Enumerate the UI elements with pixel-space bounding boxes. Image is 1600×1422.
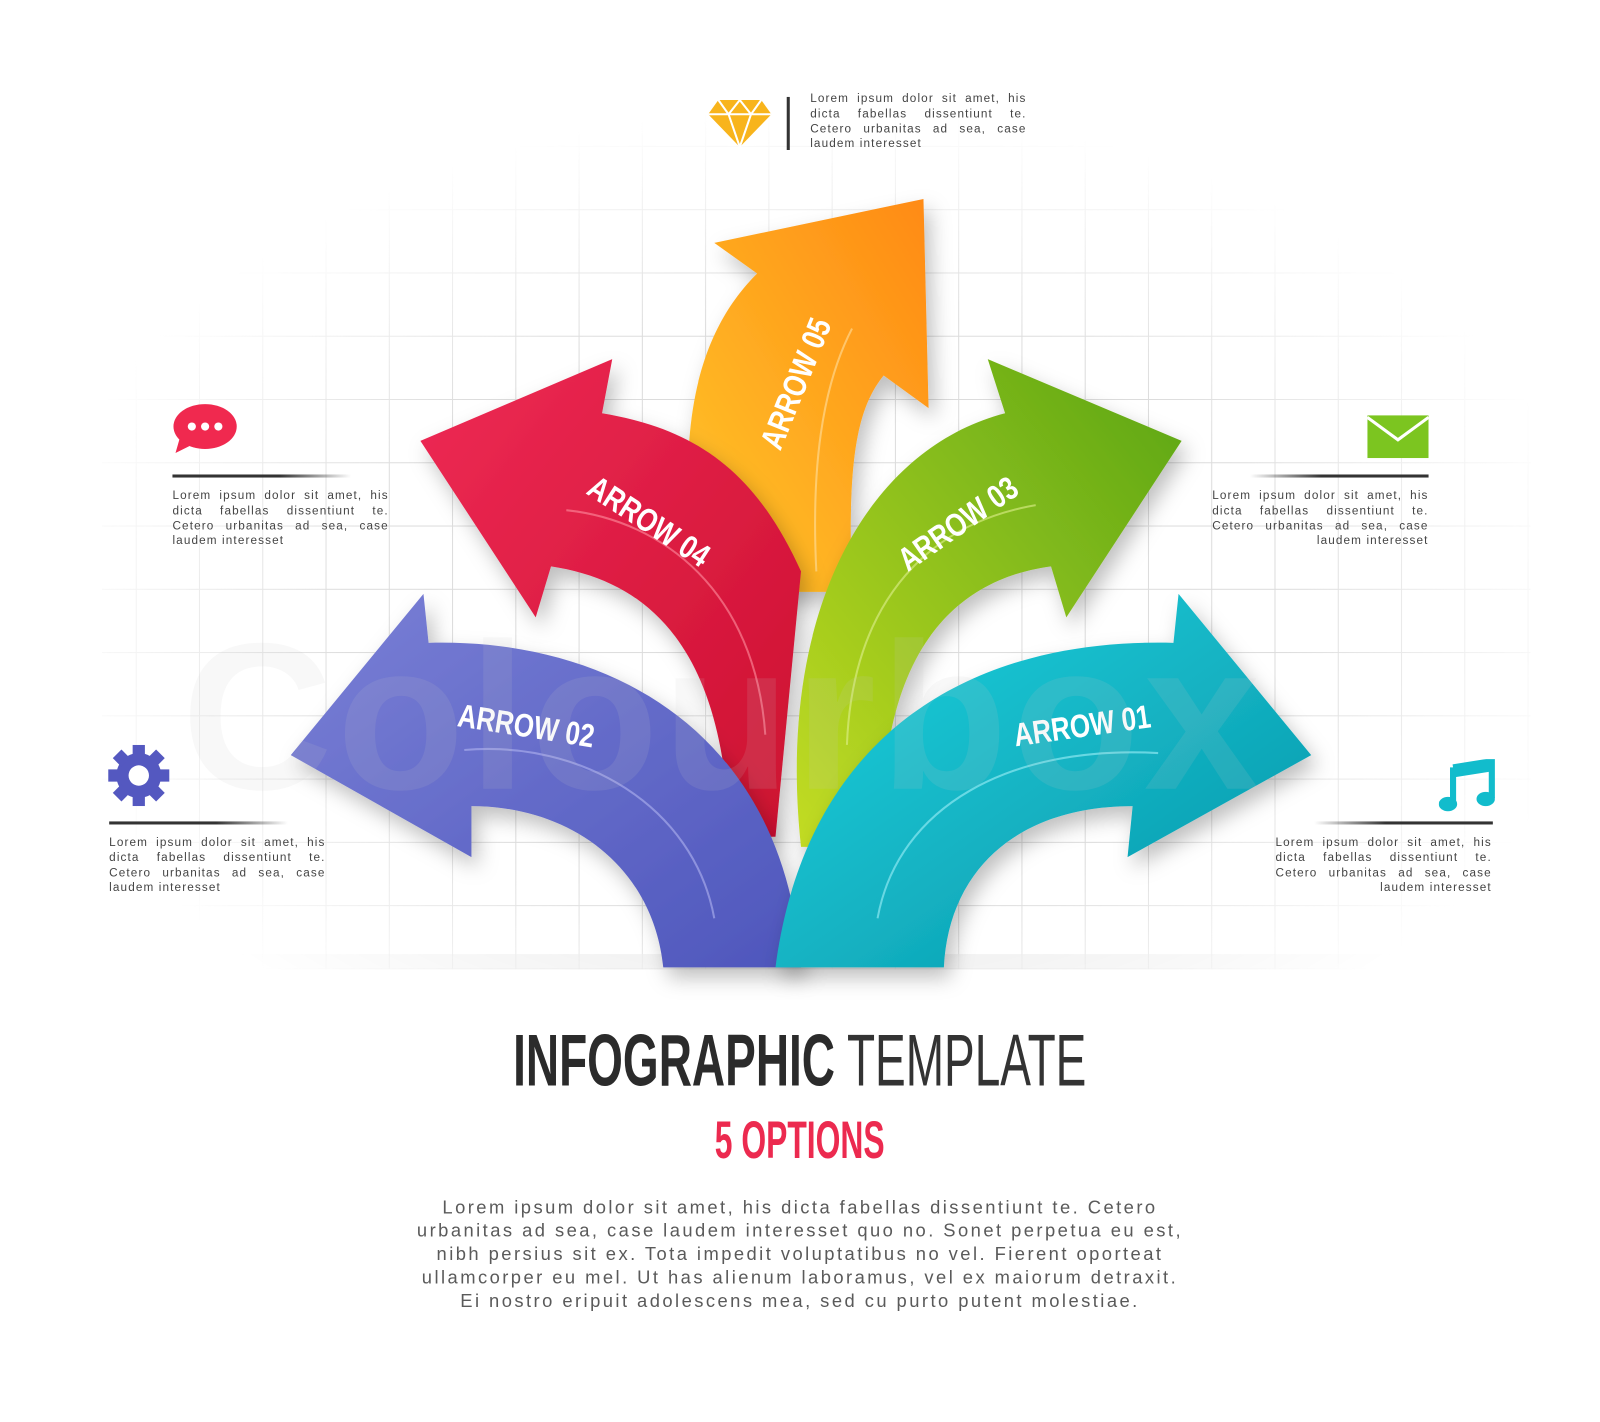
body text: urbanitas ad sea, case laudem interesset quo no. Sonet perpetua eu est, <box>417 1220 1183 1241</box>
icon: chat <box>174 404 237 453</box>
text: right top: Lorem ipsum dolor sit amet, his dicta fabellas dissentiunt te. Cetero urbanitas ad sea, case laudem interesset <box>1212 490 1429 547</box>
icon: envelope <box>1367 415 1428 458</box>
arrow 04 <box>420 359 801 837</box>
arrow 03: ARROW 03 <box>891 470 1025 578</box>
icon: gear <box>108 744 170 806</box>
arrow 05: ARROW 05 <box>754 313 839 455</box>
arrow 02: ARROW 02 <box>455 698 597 755</box>
arrows chart <box>290 199 1322 992</box>
text: top: Lorem ipsum dolor sit amet, his dicta fabellas dissentiunt te. Cetero urbanitas ad sea, case laudem interesset <box>810 93 1027 150</box>
arrow 03 <box>797 359 1182 847</box>
body text: Lorem ipsum dolor sit amet, his dicta fabellas dissentiunt te. Cetero <box>442 1197 1158 1217</box>
body text: Ei nostro eripuit adolescens mea, sed cu purto putent molestiae. <box>460 1291 1140 1311</box>
arrow 01: ARROW 01 <box>1011 699 1153 754</box>
text: left top: Lorem ipsum dolor sit amet, his dicta fabellas dissentiunt te. Cetero urbanitas ad sea, case laudem interesset <box>172 490 389 547</box>
body text <box>417 1197 1183 1311</box>
icon: diamond <box>708 100 772 146</box>
title: INFOGRAPHIC TEMPLATE <box>513 1020 1087 1102</box>
arrow 02 <box>291 594 801 967</box>
arrow 05 <box>689 199 929 592</box>
text: right bottom: Lorem ipsum dolor sit amet, his dicta fabellas dissentiunt te. Cetero urbanitas ad sea, case laudem interesset <box>1276 837 1492 894</box>
background grid <box>108 156 1525 970</box>
body text: ullamcorper eu mel. Ut has alienum laboramus, vel ex maiorum detraxit. <box>422 1267 1178 1288</box>
watermark: Colourbox <box>182 600 1264 834</box>
text: left bottom: Lorem ipsum dolor sit amet, his dicta fabellas dissentiunt te. Cetero urbanitas ad sea, case laudem interesset <box>109 837 326 894</box>
arrow 01 <box>776 594 1311 967</box>
body text: nibh persius sit ex. Tota impedit voluptatibus no vel. Fierent oporteat <box>437 1244 1163 1264</box>
arrow 04: ARROW 04 <box>581 469 717 575</box>
icon: music <box>1438 759 1495 812</box>
subtitle: 5 OPTIONS <box>715 1111 885 1170</box>
